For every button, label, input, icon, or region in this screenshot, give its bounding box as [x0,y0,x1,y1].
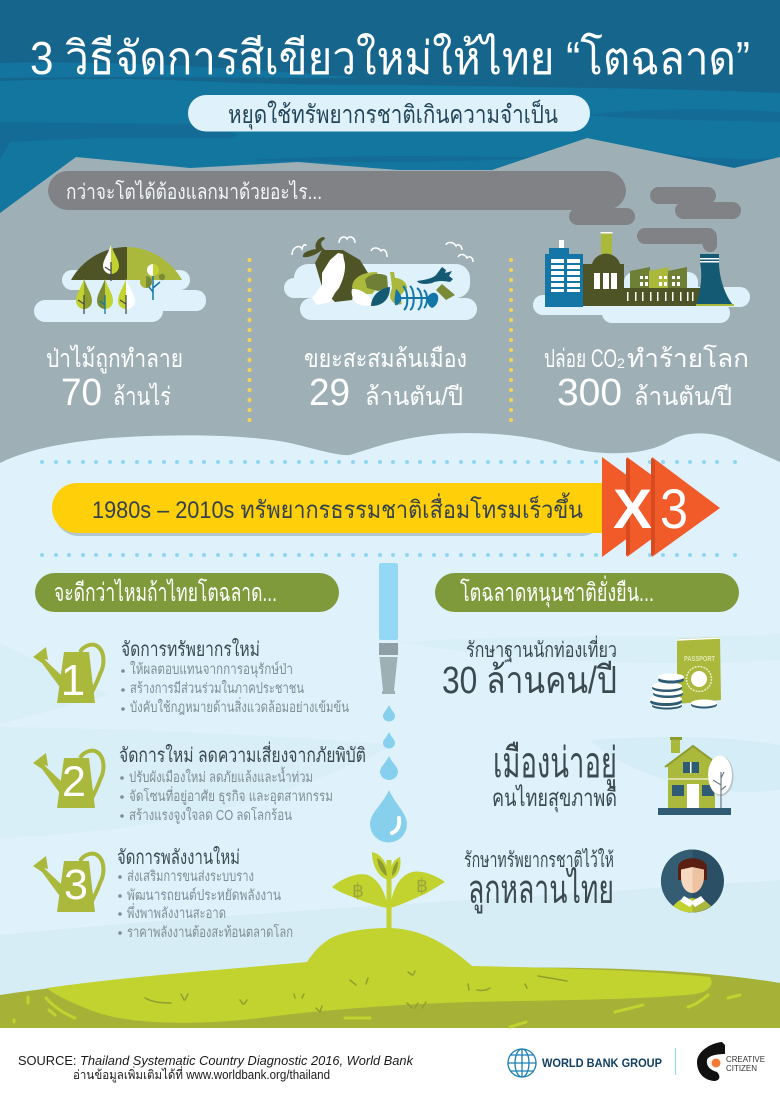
text block: step 1: ให้ผลตอบแทนจากการอนุรักษ์ป่า [130,660,293,678]
logo: creative citizen [697,1042,765,1081]
smoke banner heading: กว่าจะโตได้ต้องแลกมาด้วยอะไร... [66,180,322,204]
icon: watering can 1 [33,645,103,705]
text block: step 1: จัดการทรัพยากรใหม่ [121,638,260,661]
text block: next generation [464,848,614,913]
logo: creative citizen: CITIZEN [726,1064,757,1073]
label: garbage: ล้านตัน/ปี [365,383,463,411]
label: forest: ล้านไร่ [113,382,171,411]
text block: step 3 [117,846,293,941]
smoke banner heading [48,171,635,225]
mountain backdrop [0,138,780,470]
text block: step 3: ส่งเสริมการขนส่งระบบราง [127,869,254,885]
label: garbage: ขยะสะสมล้นเมือง [304,345,467,373]
label: garbage: 29 [309,372,350,414]
text block: step 2: จัดการใหม่ ลดความเสี่ยงจากภัยพิบัติ [119,741,366,767]
heading pill: left [35,573,339,612]
subtitle pill [188,95,590,132]
text block: next generation: รักษาทรัพยากรชาติไว้ให้ [464,848,614,872]
text block: next generation: ลูกหลานไทย [468,867,614,913]
icon: factory [533,232,750,323]
source note [18,1053,414,1083]
divider [675,1048,676,1075]
logo: world bank group: WORLD BANK GROUP [542,1056,662,1070]
label: CO2: ปล่อย CO [544,345,617,373]
label: CO2: 300 [557,372,622,414]
heading pill: left: จะดีกว่าไหมถ้าไทยโตฉลาด... [54,578,277,607]
label: CO2: ล้านตัน/ปี [634,383,732,411]
icon: water pipe and drops [370,563,407,843]
logo: world bank group [508,1049,662,1077]
text block: tourism [442,635,617,702]
icon: sprout with baht leaves: ฿ [352,881,364,902]
icon: house and tree [658,737,734,815]
text block: liveable city: คนไทยสุขภาพดี [492,784,617,813]
arrow banner: x3 [52,457,720,557]
icon: garbage [284,237,477,320]
label: forest: ป่าไม้ถูกทำลาย [46,344,183,374]
text block: liveable city [492,739,617,813]
icon: forest [34,245,206,322]
icon: passport and coins [650,637,721,710]
logo: creative citizen: CREATIVE [726,1055,765,1064]
label: CO2 [544,344,749,414]
text block: step 3: ราคาพลังงานต้องสะท้อนตลาดโลก [127,923,293,941]
dotted separators [248,258,513,422]
heading pill: right [435,573,739,612]
text block: step 1: บังคับใช้กฎหมายด้านสิ่งแวดล้อมอย่างเข้มข้น [130,697,349,716]
label: CO2: ทำร้ายโลก [627,344,749,373]
icon: watering can 3 [33,854,103,912]
arrow banner: x3: 1980s – 2010s ทรัพยากรธรรมชาติเสื่อมโทรมเร็วขึ้น [92,492,583,524]
label: garbage [304,345,467,414]
arrow banner: x3: 3 [660,477,688,540]
source note: SOURCE: Thailand Systematic Country Diagnostic 2016, World Bank [18,1053,414,1068]
heading pill: right: โตฉลาดหนุนชาติยั่งยืน... [460,575,654,608]
icon: person portrait [661,850,724,913]
sky background [0,0,780,460]
source note: อ่านข้อมูลเพิ่มเติมได้ที่ www.worldbank.org/thailand [73,1066,330,1083]
icon: sprout with baht leaves: ฿ [416,876,428,897]
text block: tourism: รักษาฐานนักท่องเที่ยว [466,635,617,662]
smoke clouds [637,187,741,252]
text block: step 3: พึ่งพาพลังงานสะอาด [127,903,226,922]
icon: sprout with baht leaves [332,852,445,932]
subtitle pill: หยุดใช้ทรัพยากรชาติเกินความจำเป็น [228,99,558,130]
light ground snowline [0,433,780,1030]
ground hill [0,928,780,1095]
text block: step 2: สร้างแรงจูงใจลด CO ลดโลกร้อน [129,806,292,824]
text block: step 1 [121,638,349,716]
label: forest [46,344,183,414]
text block: step 2 [119,741,366,824]
icon: watering can 1: 1 [61,656,85,705]
label: CO2: 2 [617,355,625,371]
text block: step 2: ปรับผังเมืองใหม่ ลดภัยแล้งและน้ำท่วม [129,766,313,786]
label: forest: 70 [61,372,102,414]
icon: watering can 3: 3 [64,861,88,909]
text block: step 3: จัดการพลังงานใหม่ [117,846,240,869]
text block: step 3: พัฒนารถยนต์ประหยัดพลังงาน [127,887,281,904]
icon: passport and coins: PASSPORT [684,656,716,663]
icon: watering can 2: 2 [62,758,86,806]
text block: liveable city: เมืองน่าอยู่ [493,739,617,788]
text block: step 1: สร้างการมีส่วนร่วมในภาคประชาชน [130,679,304,697]
icon: watering can 2 [33,751,103,808]
arrow banner: x3: X [613,477,652,540]
dotted dividers [40,460,737,557]
text block: step 2: จัดโซนที่อยู่อาศัย ธุรกิจ และอุตสาหกรรม [129,786,333,805]
text block: tourism: 30 ล้านคน/ปี [442,660,617,702]
